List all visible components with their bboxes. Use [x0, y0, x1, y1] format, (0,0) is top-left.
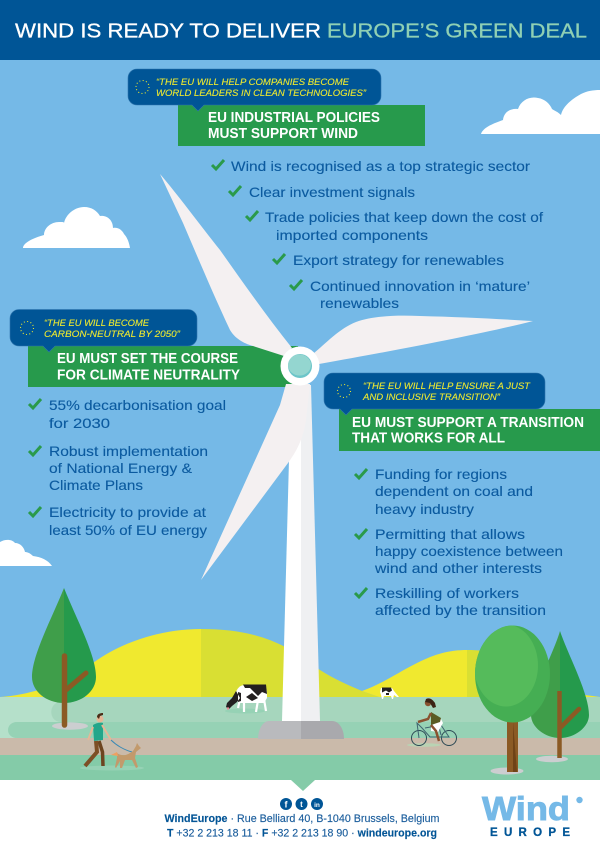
person walking dog	[80, 713, 144, 770]
heading: industrial policies: MUST SUPPORT WIND	[208, 126, 358, 142]
social icons: f	[284, 800, 288, 810]
header band with title: EUROPE’S GREEN DEAL	[327, 20, 587, 42]
checklist: climate neutrality: for 2030	[49, 415, 110, 431]
checklist: just transition: Funding for regions	[375, 466, 507, 482]
checklist: industrial policies: Trade policies that keep down the cost of	[265, 209, 543, 225]
checklist: industrial policies: imported components	[276, 227, 428, 243]
checklist: industrial policies: renewables	[320, 295, 399, 311]
footer notch	[291, 780, 315, 791]
checklist: industrial policies: Wind is recognised as a top strategic sector	[231, 158, 530, 174]
heading: climate neutrality: EU MUST SET THE COURSE	[57, 351, 238, 367]
checklist: industrial policies	[212, 158, 543, 311]
checklist: climate neutrality: 55% decarbonisation goal	[49, 397, 226, 413]
checklist: just transition: affected by the transition	[375, 602, 546, 618]
social icons: in	[314, 802, 320, 809]
cow: small distant	[380, 688, 399, 699]
WindEurope logo: Wind	[482, 790, 570, 827]
checklist: climate neutrality: of National Energy &	[49, 460, 193, 476]
tree: left conifer	[32, 588, 96, 730]
header band with title: WIND IS READY TO DELIVER	[15, 20, 321, 42]
heading: industrial policies: EU INDUSTRIAL POLICIES	[208, 110, 380, 126]
quote bubble: inclusive transition: AND INCLUSIVE TRANSITION”	[362, 392, 501, 403]
panel: climate neutrality	[10, 310, 298, 538]
quote bubble: clean technologies: “THE EU WILL HELP COMPANIES BECOME	[156, 77, 350, 88]
checklist: just transition: Permitting that allows	[375, 526, 525, 542]
header band with title	[0, 0, 600, 60]
checklist: just transition: Reskilling of workers	[375, 585, 519, 601]
social icons: t	[300, 800, 303, 809]
cloud: lower left	[0, 540, 52, 566]
quote bubble: carbon neutral: “THE EU WILL BECOME	[44, 318, 150, 329]
person cycling	[407, 698, 456, 747]
quote bubble: inclusive transition: “THE EU WILL HELP ENSURE A JUST	[363, 381, 531, 392]
checklist: just transition	[355, 466, 563, 618]
panel: just transition	[324, 373, 600, 618]
heading: just transition: EU MUST SUPPORT A TRANSITION	[352, 415, 584, 431]
heading: industrial policies	[178, 105, 425, 146]
checklist: industrial policies: Clear investment signals	[249, 184, 415, 200]
social icons	[280, 798, 323, 810]
tree: right conifer	[531, 631, 589, 762]
panel: industrial policies	[128, 69, 543, 311]
cow: large	[225, 684, 267, 714]
tower with base	[258, 385, 344, 739]
tree: round	[474, 624, 550, 774]
cloud: left	[23, 207, 130, 248]
heading: climate neutrality	[28, 346, 298, 387]
checklist: just transition: heavy industry	[375, 501, 474, 517]
contact details: WindEurope · Rue Belliard 40, B-1040 Brussels, Belgium	[164, 813, 440, 825]
hills	[0, 629, 600, 699]
turbine hub	[280, 346, 320, 386]
checklist: climate neutrality: Climate Plans	[49, 477, 143, 493]
checklist: climate neutrality: Robust implementation	[49, 443, 208, 459]
quote bubble: carbon neutral	[10, 310, 197, 352]
checklist: industrial policies: Continued innovation in ‘mature’	[310, 278, 530, 294]
checklist: climate neutrality: Electricity to provide at	[49, 504, 206, 520]
turbine blades	[160, 174, 533, 580]
checklist: climate neutrality	[29, 397, 226, 538]
checklist: industrial policies: Export strategy for renewables	[293, 252, 504, 268]
checklist: just transition: happy coexistence between	[375, 543, 563, 559]
footer	[0, 780, 600, 848]
quote bubble: clean technologies	[128, 69, 381, 111]
heading: climate neutrality: FOR CLIMATE NEUTRALITY	[57, 368, 240, 384]
quote bubble: clean technologies: WORLD LEADERS IN CLEAN TECHNOLOGIES”	[156, 88, 367, 99]
quote bubble: inclusive transition	[324, 373, 545, 415]
contact details	[164, 813, 440, 840]
WindEurope logo: EUROPE	[490, 827, 570, 839]
checklist: climate neutrality: least 50% of EU energy	[49, 522, 207, 538]
contact details: T +32 2 213 18 11 · F +32 2 213 18 90 · windeurope.org	[167, 828, 437, 840]
heading: just transition: THAT WORKS FOR ALL	[352, 430, 505, 446]
checklist: just transition: wind and other interests	[374, 560, 542, 576]
heading: just transition	[339, 409, 600, 451]
ground bands and path	[0, 697, 600, 780]
quote bubble: carbon neutral: CARBON-NEUTRAL BY 2050”	[44, 329, 181, 340]
WindEurope logo	[482, 790, 583, 839]
cloud: top right	[481, 90, 600, 134]
checklist: just transition: dependent on coal and	[375, 483, 533, 499]
